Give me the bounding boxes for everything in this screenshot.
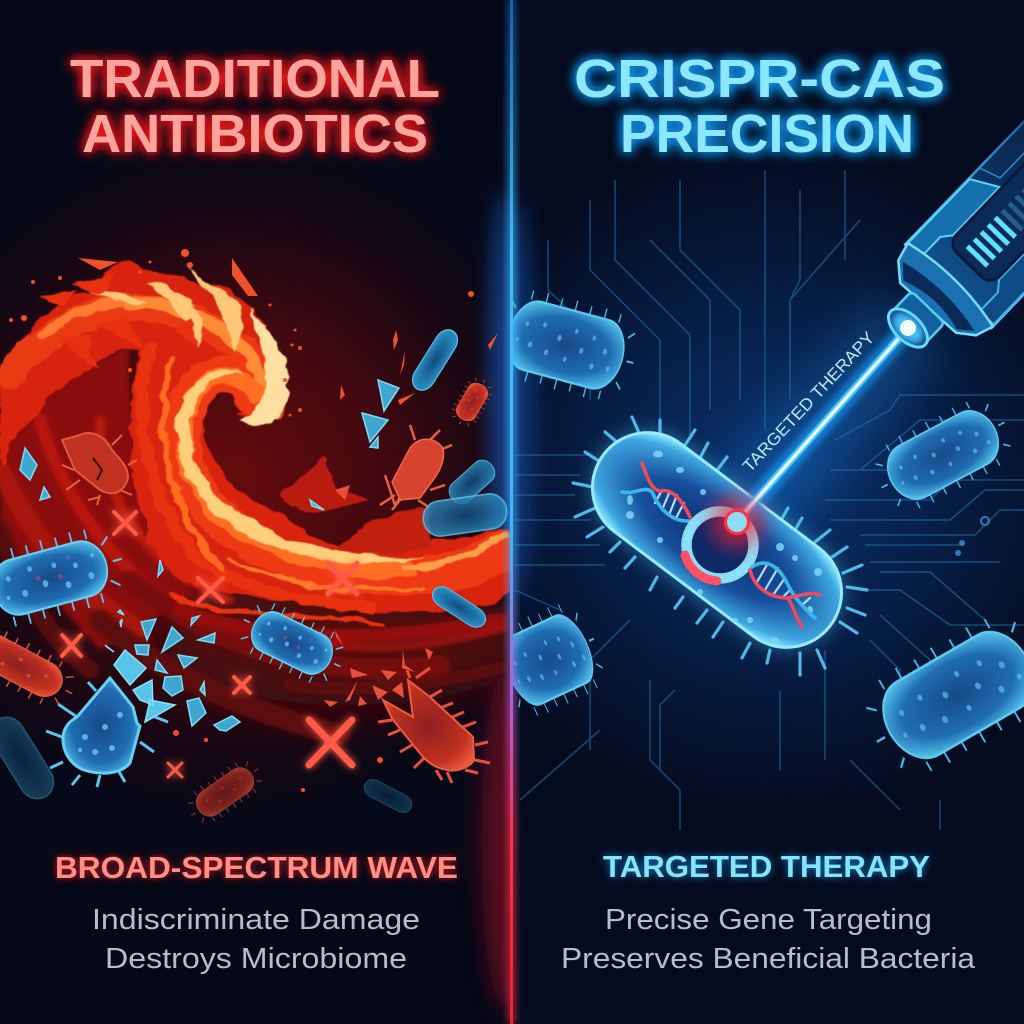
title: crispr-cas precision: [574, 49, 945, 164]
left dna strand: [622, 463, 690, 521]
flame tongues: [90, 263, 243, 354]
laser beam: [738, 328, 908, 520]
center divider: [506, 0, 517, 1024]
title: traditional antibiotics: ANTIBIOTICS: [82, 104, 428, 164]
label: targeted therapy along beam: TARGETED THERAPY: [739, 328, 878, 476]
title: crispr-cas precision: CRISPR-CAS: [574, 49, 945, 109]
text: right description: [561, 904, 976, 975]
icon: background bacteria: [482, 283, 1024, 789]
icon: red shards and small bacteria: [0, 373, 497, 831]
title: crispr-cas precision: PRECISION: [620, 104, 914, 164]
flame highlight: inner swirl: [176, 370, 425, 563]
icon: cracked blue bacterium: [46, 650, 175, 787]
heading: broad-spectrum wave: BROAD-SPECTRUM WAVE: [55, 850, 458, 885]
icon: cracked red bacterium near wave: [62, 433, 137, 505]
icon: red x marks: [62, 512, 357, 777]
icon: intact blue bacteria: [0, 530, 344, 683]
chart: circuit traces: [515, 170, 1024, 830]
icon: glass shards: [20, 380, 399, 731]
title: traditional antibiotics: TRADITIONAL: [70, 49, 440, 109]
heading: targeted therapy: TARGETED THERAPY: [603, 849, 930, 884]
dna ring: [682, 507, 758, 583]
icon: gene editing pen: [886, 120, 1024, 349]
embers: [9, 249, 498, 416]
chart: dna helix with crispr cut: [622, 463, 820, 627]
panel: crispr-cas precision: [513, 120, 1024, 830]
illustration: broad-spectrum flame wave: [0, 262, 510, 624]
icon: unspiked blue bacteria: [0, 325, 509, 816]
icon: main targeted bacterium: [570, 411, 867, 675]
text: right description: Precise Gene Targeting: [605, 904, 932, 936]
icon: cracked red bacterium right: [378, 668, 490, 783]
right dna strand: [750, 563, 820, 627]
flame highlight: crest tip: [238, 310, 289, 424]
title: traditional antibiotics: [70, 49, 440, 164]
icon: cracked red bacterium upper right: [380, 425, 452, 510]
text: left description: [92, 904, 420, 975]
text: left description: Indiscriminate Damage: [92, 904, 420, 936]
text: left description: Destroys Microbiome: [105, 943, 407, 975]
panel: traditional antibiotics: [0, 169, 510, 1016]
text: right description: Preserves Beneficial Bacteria: [561, 943, 976, 975]
chart: flame streaks under the wave: [0, 345, 505, 735]
icon: target point: [711, 496, 763, 548]
